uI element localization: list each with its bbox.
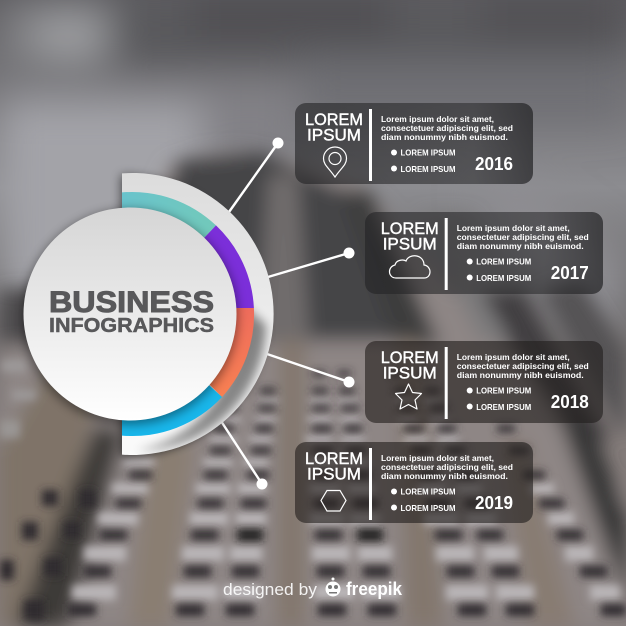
body text: consectetuer adipiscing elit, sed <box>381 123 513 133</box>
heading: IPSUM <box>383 364 437 382</box>
divider bar <box>369 448 372 520</box>
freepik credit: freepik <box>346 578 403 599</box>
bullet list: LOREM IPSUM <box>476 256 531 266</box>
title: INFOGRAPHICS <box>49 314 214 337</box>
segment blue <box>122 314 222 436</box>
heading <box>305 449 363 484</box>
icon: hexagon <box>321 490 346 511</box>
connector line 2018 <box>267 354 354 388</box>
panel: 2016 <box>295 103 533 184</box>
title: BUSINESS <box>49 286 214 319</box>
freepik credit <box>223 578 403 599</box>
year: 2017 <box>551 263 589 283</box>
year: 2018 <box>551 392 589 412</box>
bullet list: LOREM IPSUM <box>476 402 531 412</box>
body text <box>381 453 513 481</box>
body text: Lorem ipsum dolor sit amet, <box>381 114 494 124</box>
bullet list <box>391 148 456 174</box>
segment orange <box>132 308 254 397</box>
heading: LOREM <box>381 219 439 238</box>
bullet list: LOREM IPSUM <box>400 503 456 513</box>
year: 2016 <box>475 154 513 174</box>
heading <box>305 110 363 144</box>
body text: Lorem ipsum dolor sit amet, <box>381 453 494 463</box>
bullet list: LOREM IPSUM <box>476 273 531 283</box>
body text: consectetuer adipiscing elit, sed <box>381 462 513 472</box>
bullet list: LOREM IPSUM <box>400 164 456 174</box>
icon: freepik mascot <box>326 578 340 596</box>
body text: Lorem ipsum dolor sit amet, <box>457 223 570 233</box>
icon: cloud <box>389 256 430 278</box>
heading <box>381 219 439 254</box>
bullet list: LOREM IPSUM <box>400 486 456 496</box>
panel: 2017 <box>365 212 603 294</box>
body text: consectetuer adipiscing elit, sed <box>457 361 589 371</box>
heading: LOREM <box>305 449 363 468</box>
panel: 2018 <box>365 341 603 423</box>
bullet list <box>467 256 531 283</box>
body text: Lorem ipsum dolor sit amet, <box>457 352 570 362</box>
body text: diam nonummy nibh euismod. <box>457 241 584 251</box>
segment teal <box>122 192 216 314</box>
panel: 2019 <box>295 442 533 523</box>
heading: LOREM <box>381 348 439 367</box>
body text <box>457 352 589 380</box>
icon: map pin <box>324 147 346 177</box>
freepik credit: designed by <box>223 580 318 599</box>
body text: diam nonummy nibh euismod. <box>381 132 508 142</box>
icon: star <box>396 384 422 409</box>
divider bar <box>369 109 372 181</box>
bullet list <box>391 486 456 513</box>
body text: consectetuer adipiscing elit, sed <box>457 232 589 242</box>
body text <box>381 114 513 142</box>
bullet list: LOREM IPSUM <box>476 386 531 396</box>
divider bar <box>445 347 448 419</box>
connector line 2016 <box>229 138 284 212</box>
heading: IPSUM <box>307 126 361 144</box>
title <box>49 286 214 337</box>
heading: IPSUM <box>383 234 437 254</box>
heading: IPSUM <box>307 464 361 484</box>
body text: diam nonummy nibh euismod. <box>457 370 584 380</box>
segment purple <box>132 225 254 314</box>
year: 2019 <box>475 493 513 513</box>
bullet list: LOREM IPSUM <box>400 148 456 158</box>
connector line 2019 <box>221 421 268 490</box>
body text: diam nonummy nibh euismod. <box>381 471 508 481</box>
body text <box>457 223 589 251</box>
heading: LOREM <box>305 110 363 129</box>
connector line 2017 <box>268 248 354 277</box>
outer grey half disc <box>122 173 274 455</box>
heading <box>381 348 439 382</box>
divider bar <box>445 218 448 290</box>
main circular graphic <box>22 173 274 457</box>
white centre disc <box>24 208 236 420</box>
bullet list <box>467 386 531 412</box>
